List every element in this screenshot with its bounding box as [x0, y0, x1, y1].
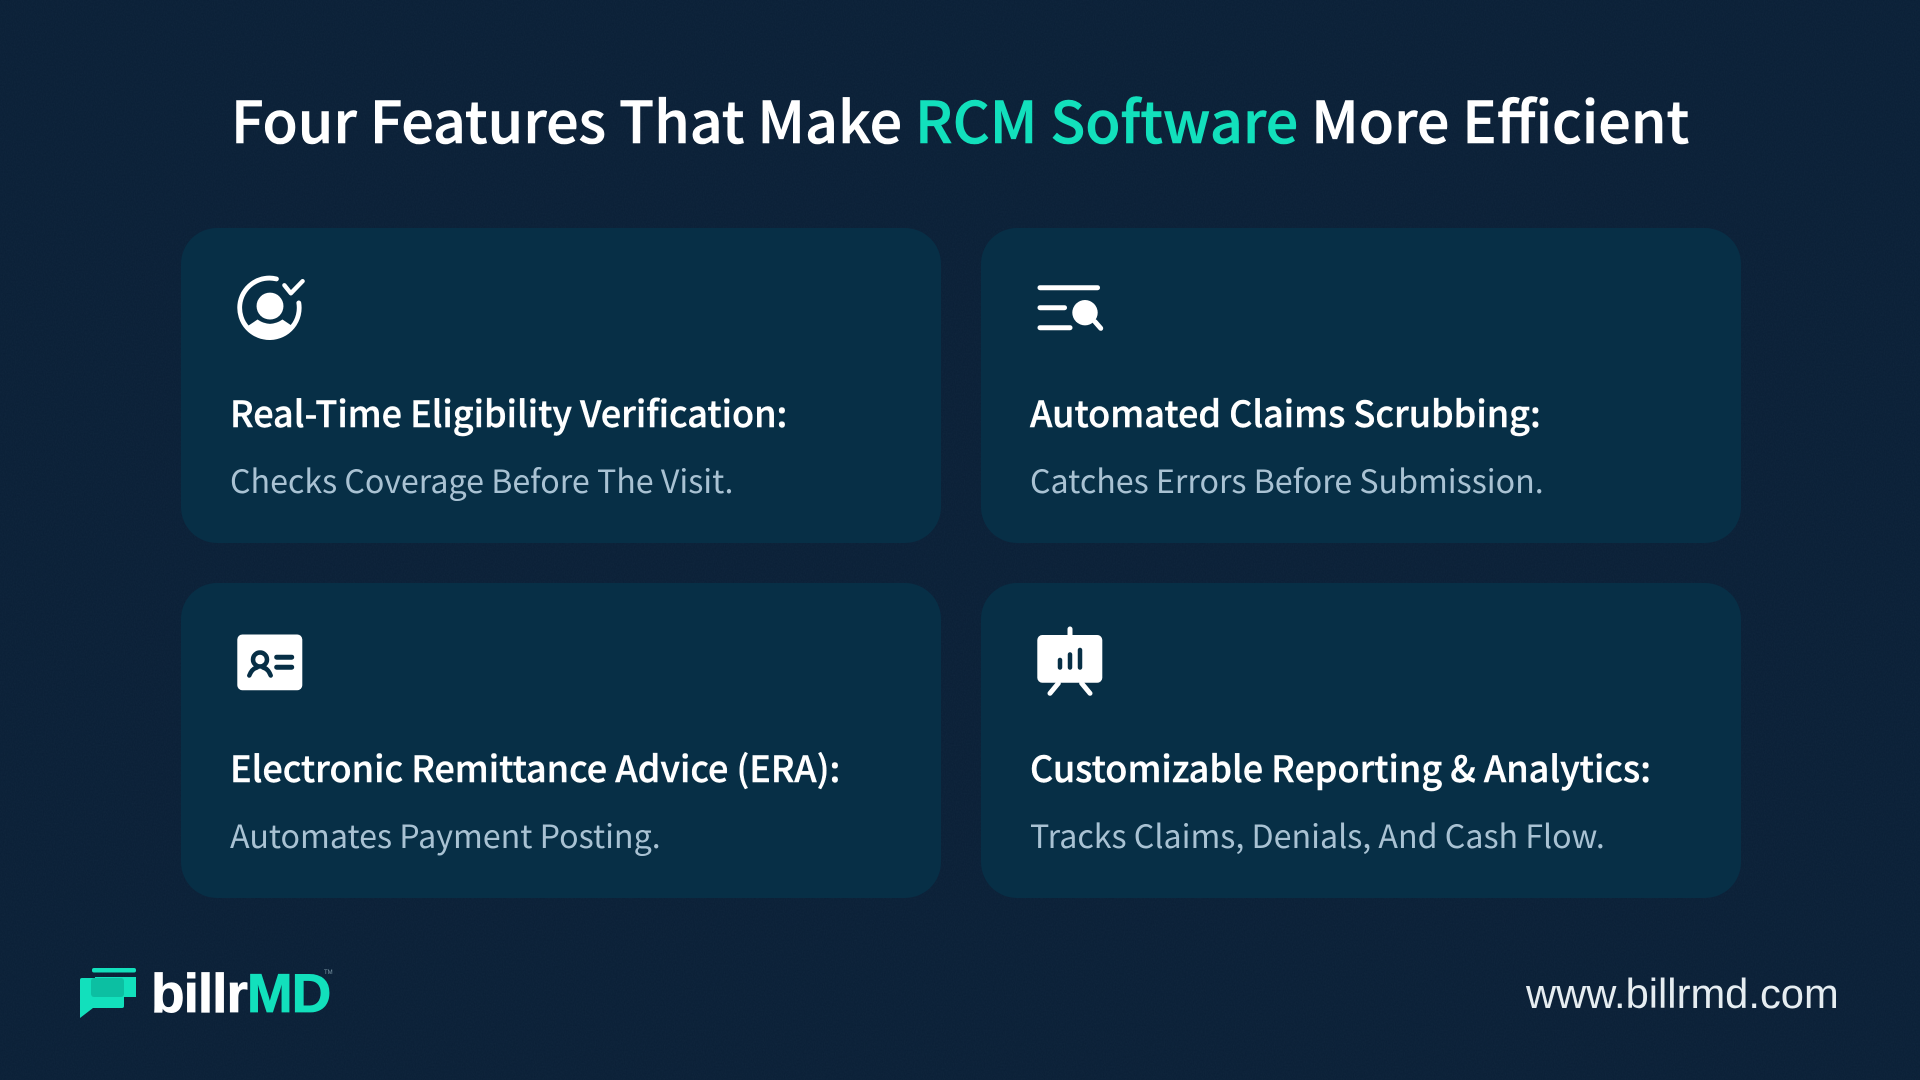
icon: user check: [237, 276, 305, 340]
logo: billrMD: [80, 962, 333, 1024]
description: Automates Payment Posting.: [230, 812, 661, 858]
panel: electronic remittance advice: [181, 583, 941, 898]
icon: id card: [237, 634, 302, 690]
heading: Customizable Reporting & Analytics:: [1030, 741, 1651, 793]
icon: presentation board: [1037, 626, 1102, 696]
description: Catches Errors Before Submission.: [1030, 457, 1544, 503]
trademark: TM: [324, 970, 333, 976]
icon: list search: [1038, 285, 1104, 331]
heading: Automated Claims Scrubbing:: [1030, 386, 1541, 438]
heading: Real-Time Eligibility Verification:: [230, 386, 787, 438]
panel: real-time eligibility verification: [181, 228, 941, 543]
panel: automated claims scrubbing: [981, 228, 1741, 543]
panel: customizable reporting and analytics: [981, 583, 1741, 898]
heading: Electronic Remittance Advice (ERA):: [230, 741, 840, 793]
website url: www.billrmd.com: [1526, 970, 1839, 1017]
icon: chat bubbles: [80, 968, 136, 1018]
description: Checks Coverage Before The Visit.: [230, 457, 733, 503]
wordmark: billrMD: [151, 962, 330, 1024]
title: Four Features That Make RCM Software More Efficient: [231, 76, 1689, 160]
description: Tracks Claims, Denials, And Cash Flow.: [1030, 812, 1605, 858]
